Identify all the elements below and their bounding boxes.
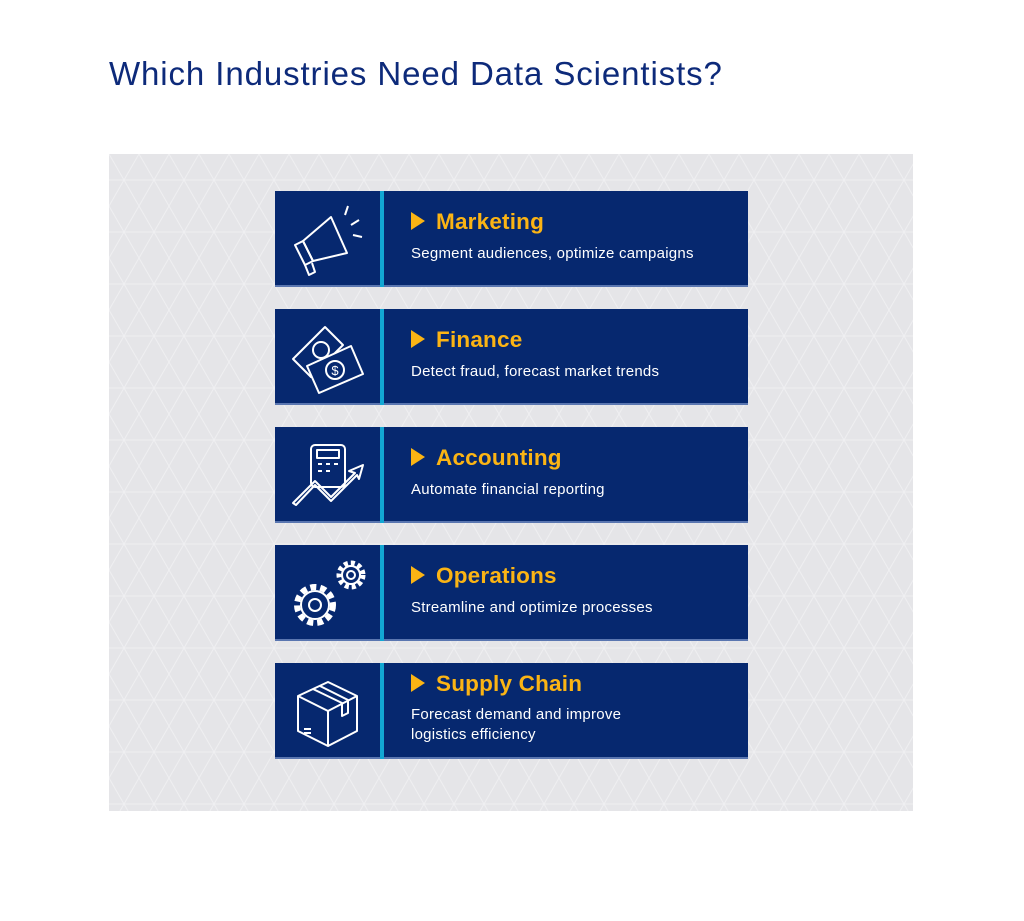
background panel [109,154,913,811]
card: Supply Chain: Supply Chain [436,671,582,696]
card: Accounting: Automate financial reporting [411,481,605,498]
title: Which Industries Need Data Scientists? [109,55,723,92]
card: Finance [275,309,748,405]
icon: calculator with arrow [292,444,364,506]
card: Finance: Detect fraud, forecast market trends [411,363,659,380]
icon: money: $ [331,363,339,378]
card: Marketing [275,191,748,287]
card: Finance: Finance [436,327,522,352]
icon: box [297,681,358,747]
card: Accounting: Accounting [436,445,562,470]
card: Accounting [275,427,748,523]
icon: megaphone [294,206,362,276]
icon: money [292,326,364,394]
card: Operations: Operations [436,563,557,588]
card: Marketing: Marketing [436,209,544,234]
card: Marketing: Segment audiences, optimize campaigns [411,245,694,262]
card: Operations [275,545,748,641]
card: Supply Chain [275,663,748,759]
card: Operations: Streamline and optimize processes [411,599,653,616]
icon: gears [294,560,366,626]
card: Supply Chain: logistics efficiency [411,726,536,743]
card: Supply Chain: Forecast demand and improve [411,706,621,723]
